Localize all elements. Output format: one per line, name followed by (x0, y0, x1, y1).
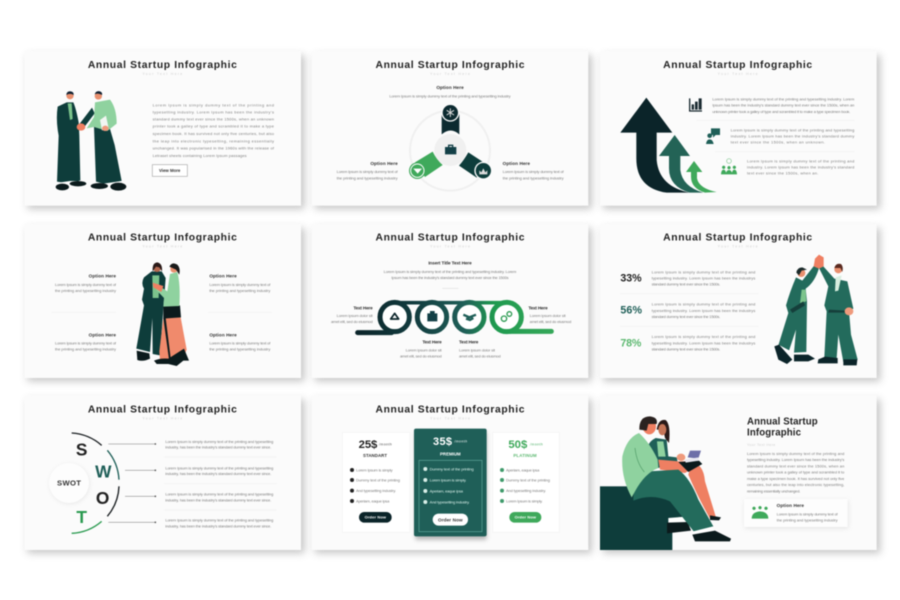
option top left (55, 273, 117, 293)
text block (747, 451, 845, 493)
option top right (209, 273, 271, 293)
stat: 33%: Lorem Ipsum is simply dummy text of the printing and (652, 269, 755, 274)
text block: typesetting industry. Lorem Ipsum has been the industry's (153, 109, 274, 114)
illustration: couple sitting (622, 416, 731, 541)
panel: closing couple (600, 395, 880, 553)
heading (747, 417, 818, 439)
text O: Lorem Ipsum is simply dummy text of the printing and typesetting (165, 491, 273, 496)
text block: remaining essentially unchanged. (747, 488, 800, 493)
pricing card: platinum: And typesetting industry. (506, 488, 546, 493)
option bottom left (55, 332, 117, 352)
panel: percentages high five (600, 224, 880, 381)
arrow: dark (620, 98, 690, 193)
option card: Lorem Ipsum is simply dummy text of (777, 511, 839, 516)
title: Annual Startup Infographic (375, 404, 525, 415)
icon: team (752, 506, 768, 519)
right option text: the printing and typesetting industry (503, 175, 564, 180)
text block: printer took a galley of type and scrambled it to make a type (153, 124, 275, 129)
pricing card: premium: Lorem Ipsum is simply. (430, 477, 466, 482)
pricing card: standart: Dummy text of the printing (356, 477, 400, 482)
pricing card: platinum: PLATINUM (513, 453, 537, 458)
text block: standard dummy text ever since the 1500s, when an unknown (153, 116, 274, 121)
panel: pricing (312, 395, 592, 553)
stat: 78%: 78% (620, 337, 642, 349)
left option text (337, 161, 399, 180)
illustration: two men shaking hands (56, 91, 126, 191)
text block: Lorem Ipsum is simply dummy text of the printing and (153, 102, 274, 107)
step text 2: Lorem ipsum dolor sit (406, 348, 443, 353)
pricing card: premium: Aperiam, eaque ipsa (430, 488, 464, 493)
pricing card: premium: PREMIUM (440, 451, 461, 456)
option top left: Option Here (89, 273, 116, 278)
icon: cloud network (391, 313, 399, 319)
text W: industry, has been the industry's standard dummy text ever since. (165, 471, 271, 476)
wheel diagram (409, 104, 492, 191)
step text 3: amet elit, sed do eiusmod (459, 354, 501, 359)
option bottom right (209, 332, 271, 352)
pricing card: standart (342, 432, 410, 532)
insert title text: Ipsum has been the industry's standard dummy text ever since the 1500s (391, 275, 509, 280)
stat: 78%: typesetting industry. Lorem Ipsum has been the industrys (652, 340, 755, 345)
text T (165, 518, 273, 529)
subtitle: Your Text Here (142, 416, 182, 420)
title: Annual Startup Infographic (663, 60, 812, 71)
title: Annual Startup Infographic (88, 404, 237, 415)
panel: growth arrows (600, 51, 880, 209)
right option text: Lorem Ipsum is simply dummy text of (503, 169, 565, 174)
text S (165, 439, 273, 450)
stat: 78% (620, 334, 755, 351)
option top right: Option Here (209, 273, 237, 278)
pricing card: standart: 25$ (359, 439, 378, 451)
step text 3: Text Here (459, 340, 479, 345)
icon: briefcase (445, 145, 456, 154)
pricing card: standart: STANDART (363, 453, 387, 458)
text block 3: Lorem Ipsum is simply dummy text of the printing and (747, 159, 854, 164)
subtitle: Your Text Here (718, 244, 758, 248)
pricing card: platinum: 50$ (508, 439, 528, 451)
title: Annual Startup Infographic (88, 232, 237, 243)
stat: 56%: standard dummy text ever since the 1500s. (652, 314, 720, 319)
stat: 78%: standard dummy text ever since the 1500s. (652, 346, 720, 351)
panel: SWOT (24, 395, 305, 553)
text block: the leap into electronic typesetting, remaining essentially (153, 138, 274, 143)
subtitle: Your Text Here (142, 72, 182, 76)
text block: Lorem Ipsum is simply dummy text of the printing and (747, 451, 844, 456)
heading: Infographic (747, 428, 802, 439)
chart: SWOT wheel (49, 433, 119, 533)
text block (153, 102, 275, 158)
pricing card: platinum: Aperiam, eaque ipsa (506, 467, 540, 472)
pricing card: platinum: Lorem Ipsum is simply. (506, 498, 543, 503)
button: view more (152, 165, 187, 176)
icon: gears (501, 312, 512, 321)
arrow: teal (659, 135, 703, 193)
left option text: Option Here (370, 161, 398, 166)
pricing card: standart: Order Now (365, 515, 387, 520)
arrow: green (686, 161, 717, 193)
icon: handshake (413, 169, 422, 174)
text T: Lorem Ipsum is simply dummy text of the printing and typesetting (165, 518, 273, 523)
option top right: the printing and typesetting industry (209, 288, 270, 293)
text S: industry, has been the industry's standard dummy text ever since. (165, 445, 271, 450)
text block 3: text ever since the 1500s, when an. (747, 171, 818, 176)
stat: 33%: standard dummy text ever since the 1500s. (652, 282, 720, 287)
step text 4: amet elit, sed do eiusmod (530, 319, 571, 324)
step text 2: amet elit, sed do eiusmod (400, 354, 442, 359)
text W (165, 465, 273, 476)
text block: specimen book. It has survived not only five centuries, but also (153, 131, 275, 136)
text block: centuries, but also the leap into electronic typesetting, (747, 482, 844, 487)
step text 3 (459, 340, 501, 359)
title: Annual Startup Infographic (88, 60, 237, 71)
insert title text: Lorem Ipsum is simply dummy text of the printing and typesetting industry. Lorem (384, 269, 517, 274)
text block 2 (731, 128, 854, 145)
option bottom right: Option Here (209, 332, 237, 337)
subtitle: Your Text Here (430, 416, 470, 420)
option bottom left: Option Here (89, 332, 116, 337)
text block 1: Ipsum has been the industry's standard dummy text ever since the 1500s, when an (712, 103, 854, 108)
insert title text: Insert Title Text Here (428, 261, 472, 266)
pricing card: standart: Lorem Ipsum is simply (356, 467, 393, 472)
illustration: two women talking (136, 262, 189, 366)
subtitle: Your Text Here (430, 244, 470, 248)
option bottom left: Lorem Ipsum is simply dummy text of (55, 341, 117, 346)
stat: 33%: 33% (620, 273, 642, 285)
insert title text (384, 261, 517, 280)
subtitle: Your Text Here (747, 443, 775, 447)
pricing card: platinum: Order Now (515, 515, 537, 520)
right option text (503, 161, 565, 180)
step text 2: Text Here (422, 340, 442, 345)
pricing card: premium: Order Now (438, 517, 463, 522)
subtitle: Your Text Here (142, 244, 182, 248)
icon: bar chart (689, 98, 702, 112)
step text 4 (528, 305, 571, 324)
text block 1: unknown printer took a galley of type and scrambled it to make a type specimen book. (712, 109, 850, 114)
chart: SWOT wheel: S (76, 440, 87, 460)
text W: Lorem Ipsum is simply dummy text of the printing and typesetting (165, 465, 273, 470)
panel: process timeline (312, 224, 592, 381)
option top left: the printing and typesetting industry (55, 288, 116, 293)
option top left: Lorem Ipsum is simply dummy text of (55, 282, 117, 287)
pricing card: premium: 35$ (433, 436, 452, 448)
chart: SWOT wheel: T (76, 507, 87, 527)
top option text: Lorem Ipsum is simply dummy text of the printing and typesetting industry (389, 93, 511, 98)
pricing card: platinum: /month (529, 442, 543, 446)
text block 2: text ever since the 1500s, when an unknown. (731, 140, 825, 145)
text S: Lorem Ipsum is simply dummy text of the printing and typesetting (165, 439, 273, 444)
title: Annual Startup Infographic (375, 60, 525, 71)
step text 3: Lorem ipsum dolor sit (459, 348, 496, 353)
stat: 56% (620, 302, 755, 319)
block seat (600, 486, 672, 550)
arrows (108, 443, 156, 523)
pricing card: standart: Aperiam, eaque ipsa (356, 498, 390, 503)
pricing card: premium (414, 429, 487, 540)
option bottom right: the printing and typesetting industry (209, 347, 270, 352)
top option text (389, 85, 511, 98)
step text 1: amet elit, sed do eiusmod (331, 319, 373, 324)
stat: 33% (620, 269, 755, 287)
top option text: Option Here (436, 85, 464, 90)
option bottom right: Lorem Ipsum is simply dummy text of (209, 341, 271, 346)
option card: the printing and typesetting industry (777, 517, 838, 522)
chart: linked circle chain (358, 302, 551, 333)
pricing card: standart: /month (378, 442, 392, 446)
right option text: Option Here (503, 161, 530, 166)
text block: typesetting industry. Lorem Ipsum has been the industry's (747, 457, 844, 462)
chart: SWOT wheel: W (95, 461, 112, 481)
text O (165, 491, 273, 502)
option card: Option Here (777, 503, 804, 508)
panel: handshake intro (24, 51, 305, 209)
panel: three options wheel (312, 51, 592, 209)
pricing card: premium: And typesetting industry. (430, 499, 470, 504)
pricing card: premium: Dummy text of the printing (430, 466, 474, 471)
text block 2: industry. Lorem Ipsum has been the industry's standard dummy (731, 134, 854, 139)
stat: 56%: Lorem Ipsum is simply dummy text of the printing and (652, 302, 755, 307)
text block: unknown printer took a galley of type and scrambled it to (747, 470, 845, 475)
illustration: two men high five (774, 255, 858, 365)
panel: two women options (24, 224, 305, 381)
step text 4: Text Here (528, 305, 548, 310)
pricing card: platinum: Dummy text of the printing (506, 477, 550, 482)
pricing card: platinum (493, 432, 559, 532)
title: Annual Startup Infographic (663, 232, 812, 243)
icon: team (479, 168, 487, 174)
left option text: the printing and typesetting industry (337, 175, 398, 180)
text O: industry, has been the industry's standard dummy text ever since. (165, 497, 271, 502)
step text 1 (331, 305, 374, 324)
text block: standard dummy text ever since the 1500s, when an (747, 463, 844, 468)
heading: Annual Startup (747, 417, 818, 428)
icon: briefcase (427, 311, 437, 321)
subtitle: Your Text Here (430, 72, 470, 76)
stat: 33%: typesetting industry. Lorem Ipsum has been the industrys (652, 276, 755, 281)
icon: speech presenter (706, 128, 720, 144)
stat: 78%: Lorem Ipsum is simply dummy text of the printing and (652, 334, 755, 339)
text block 2: Lorem Ipsum is simply dummy text of the printing and typesetting (731, 128, 854, 133)
option top right: Lorem Ipsum is simply dummy text of (209, 282, 271, 287)
text block 1 (712, 96, 855, 114)
step text 1: Text Here (353, 305, 373, 310)
left option text: Lorem Ipsum is simply dummy text of (337, 169, 399, 174)
icon: snowflake (447, 108, 454, 117)
step text 2 (400, 340, 443, 359)
text block 1: Lorem Ipsum is simply dummy text of the printing and typesetting industry. Lorem (712, 96, 855, 101)
icon: handshake (463, 315, 476, 320)
subtitle: Your Text Here (718, 72, 758, 76)
step text 4: Lorem ipsum dolor sit (530, 313, 567, 318)
step text 1: Lorem ipsum dolor sit (337, 313, 374, 318)
option card (744, 499, 848, 528)
text block 3 (747, 159, 854, 176)
stat: 56%: 56% (620, 305, 643, 317)
title: Annual Startup Infographic (375, 232, 525, 243)
text T: industry, has been the industry's standard dummy text ever since. (165, 524, 271, 529)
option bottom left: the printing and typesetting industry (55, 347, 116, 352)
pricing card: premium: /month (453, 440, 467, 444)
text block: make a type specimen book. It has survived not only five (747, 476, 845, 481)
chart: SWOT wheel: O (96, 488, 109, 508)
text block: unchanged. It was popularised in the 1960s with the release of (153, 146, 275, 151)
icon: team with bulb (721, 159, 737, 174)
pricing card: standart: And typesetting industry. (356, 488, 396, 493)
text block 3: industry. Lorem Ipsum has been the industry's standard (747, 165, 854, 170)
button: view more: View More (159, 168, 181, 173)
stat: 56%: typesetting industry. Lorem Ipsum has been the industrys (652, 308, 755, 313)
chart: SWOT wheel: SWOT (57, 479, 81, 488)
text block: Letraset sheets containing Lorem Ipsum passages (153, 153, 247, 158)
